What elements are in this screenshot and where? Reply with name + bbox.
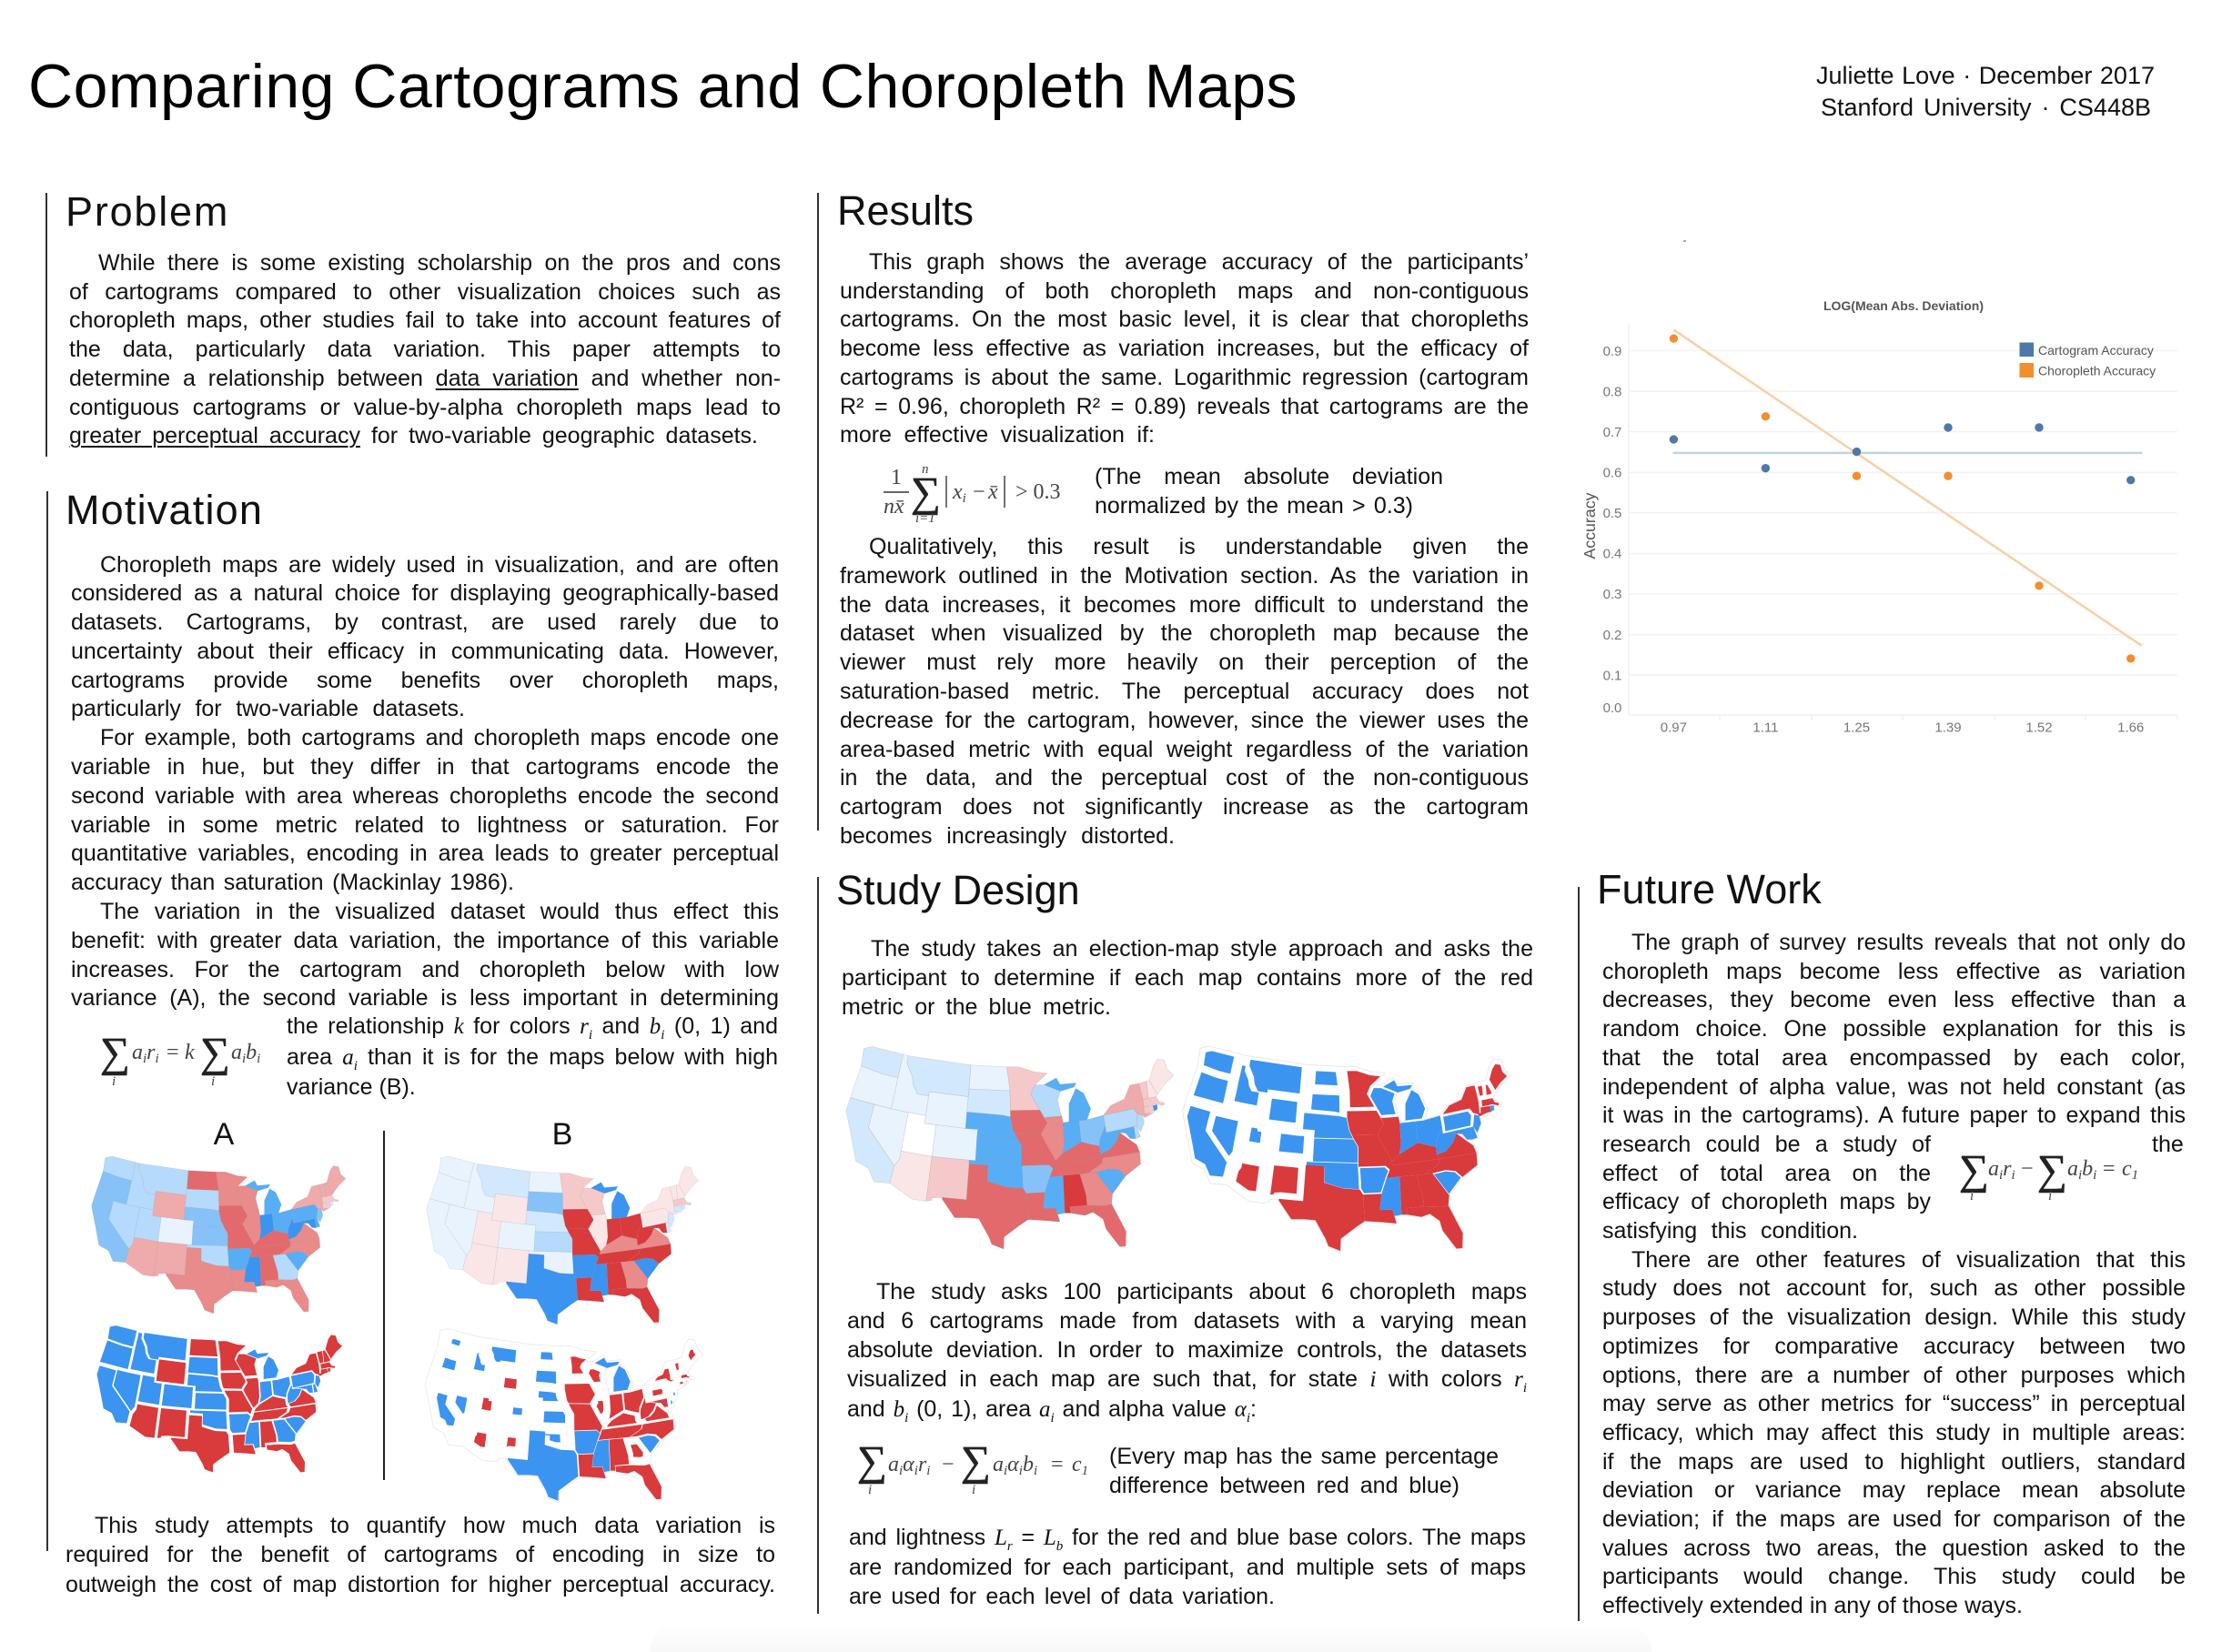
- plot area: [1581, 323, 2177, 736]
- map: non-contiguous cartogram, high variance: [425, 1328, 703, 1503]
- text: future work paragraphs: The graph of survey results reveals that not only do: [1631, 930, 2186, 955]
- legend: Cartogram Accuracy: [2038, 343, 2154, 358]
- text: beside formula: [287, 1013, 778, 1100]
- text: future work paragraphs: options, there are a number of other purposes which: [1602, 1363, 2186, 1388]
- formula: sum a r equals k sum a b: i: [156, 1052, 159, 1066]
- y axis labels: 0.8: [1603, 385, 1621, 399]
- formula: alpha weighted sums constant: 1: [1082, 1464, 1088, 1478]
- formula: sum a r equals k sum a b: ∑: [200, 1029, 230, 1075]
- title: Comparing Cartograms and Choropleth Maps: [28, 52, 1298, 121]
- x axis labels: 1.66: [2117, 720, 2144, 736]
- formula: constant total area difference: i: [1970, 1189, 1974, 1204]
- text: motivation paragraphs: cartograms provide some benefits over choropleth maps,: [71, 668, 779, 693]
- text: participants and controls: The study asks 100 participants about 6 choropleth maps: [876, 1279, 1527, 1304]
- formula: mean absolute deviation condition: [884, 462, 1061, 526]
- text: motivation paragraphs: considered as a natural choice for displaying geographically-based: [71, 580, 779, 606]
- y axis labels: 0.7: [1603, 425, 1621, 440]
- panel: problem: [45, 188, 781, 457]
- formula: alpha weighted sums constant: a: [888, 1453, 899, 1476]
- text: motivation paragraphs: particularly for two-variable datasets.: [71, 696, 465, 721]
- formula: mean absolute deviation condition: x̄: [987, 480, 998, 504]
- text: results intro: This graph shows the average accuracy of the participants’: [869, 249, 1529, 275]
- author and course byline: [1816, 62, 2155, 121]
- formula: sum a r equals k sum a b: a: [132, 1041, 143, 1064]
- text: study approach: [842, 936, 1533, 1020]
- formula: constant total area difference: i: [2093, 1168, 2096, 1183]
- text: participants and controls: and bi (0, 1), area ai and alpha value αi:: [847, 1396, 1257, 1425]
- text: motivation paragraphs: Choropleth maps are widely used in visualization, and are often: [100, 551, 779, 577]
- text: lightness and randomization: are randomized for each participant, and multiple sets of maps: [849, 1555, 1526, 1580]
- label: map group A: A: [214, 1117, 234, 1152]
- map: example non-contiguous cartogram: [1182, 1046, 1512, 1252]
- text: qualitative discussion: dataset when visualized by the choropleth map because the: [840, 620, 1529, 646]
- text: study aim: outweigh the cost of map distortion for higher perceptual accuracy.: [66, 1572, 775, 1597]
- map: choropleth, high variance: [426, 1155, 699, 1325]
- text: future work paragraphs: effect of total area on the: [1602, 1161, 1931, 1186]
- formula: constant total area difference: b: [2082, 1157, 2093, 1181]
- text: formula explanation: [1095, 464, 1443, 519]
- formula: alpha weighted sums constant: i: [926, 1464, 930, 1478]
- text: problem statement: contiguous cartograms or value-by-alpha choropleth maps lead to: [69, 395, 781, 420]
- text: qualitative discussion: viewer must rely more heavily on their perception of the: [840, 650, 1529, 675]
- formula: constant total area difference: 1: [2132, 1168, 2138, 1183]
- formula: alpha weighted sums constant: r: [918, 1453, 927, 1476]
- legend: Choropleth Accuracy: [2038, 364, 2156, 378]
- y axis labels: 0.4: [1603, 547, 1621, 562]
- formula: sum a r equals k sum a b: =: [167, 1041, 179, 1064]
- text: future work paragraphs: the: [2152, 1132, 2184, 1157]
- text: formula explanation: (Every map has the same percentage: [1109, 1444, 1499, 1469]
- formula: alpha weighted sums constant: i: [899, 1464, 903, 1478]
- text: future work paragraphs: deviation or variance may replace mean absolute: [1602, 1477, 2186, 1503]
- text: formula explanation: difference between red and blue): [1109, 1473, 1459, 1498]
- text: study aim: [66, 1513, 775, 1597]
- formula: mean absolute deviation condition: n: [922, 462, 928, 477]
- text: motivation paragraphs: variable in hue, but they differ in that cartograms encode the: [71, 754, 779, 780]
- text: qualitative discussion: decrease for the cartogram, however, since the viewer uses the: [840, 708, 1529, 733]
- formula: constant total area difference: =: [2103, 1157, 2116, 1181]
- text: motivation paragraphs: The variation in the visualized dataset would thus effect this: [100, 899, 779, 924]
- text: motivation paragraphs: datasets. Cartograms, by contrast, are used rarely due to: [71, 609, 779, 635]
- x axis labels: [1661, 720, 2144, 736]
- formula: sum a r equals k sum a b: k: [185, 1041, 195, 1064]
- text: study approach: The study takes an election-map style approach and asks the: [871, 936, 1533, 962]
- y axis labels: [1603, 344, 1621, 716]
- formula: constant total area difference: a: [2067, 1157, 2078, 1181]
- text: motivation paragraphs: variable in some metric related to lightness or saturation. For: [71, 812, 779, 838]
- y axis title: Accuracy: [1581, 492, 1599, 559]
- formula: constant total area difference: i: [2078, 1168, 2082, 1183]
- formula: constant total area difference: c: [2122, 1157, 2132, 1181]
- formula: alpha weighted sums constant: i: [868, 1483, 872, 1497]
- chart: accuracy vs log mean absolute deviation: [1581, 240, 2178, 736]
- formula: alpha weighted sums constant: a: [993, 1453, 1004, 1476]
- formula: sum a r equals k sum a b: i: [242, 1052, 246, 1066]
- text: results intro: become less effective as variation increases, but the efficacy of: [840, 336, 1529, 361]
- y axis labels: 0.3: [1603, 587, 1621, 602]
- text: motivation paragraphs: [71, 551, 779, 1011]
- text: future work paragraphs: deviation; if the maps are used for comparison of the: [1602, 1506, 2186, 1532]
- chart title: LOG(Mean Abs. Deviation): [1823, 298, 1984, 313]
- text: future work paragraphs: optimizes for comparative accuracy between two: [1602, 1334, 2186, 1359]
- text: future work paragraphs: [1602, 930, 2186, 1618]
- trend lines: [1672, 330, 2142, 646]
- formula: constant total area difference: ∑: [1959, 1146, 1989, 1193]
- text: study approach: metric or the blue metric.: [842, 994, 1111, 1020]
- text: future work paragraphs: if the maps are used to highlight outliers, standard: [1602, 1449, 2186, 1475]
- y axis labels: 0.2: [1603, 628, 1621, 643]
- formula: sum a r equals k sum a b: r: [146, 1041, 156, 1064]
- text: motivation paragraphs: benefit: with greater data variation, the importance of this variable: [71, 928, 779, 953]
- text: future work paragraphs: satisfying this condition.: [1602, 1218, 1858, 1244]
- formula: constant total area difference: i: [2048, 1189, 2052, 1204]
- heading: problem: Problem: [66, 188, 229, 235]
- text: future work paragraphs: values across two areas, the question asked to the: [1602, 1536, 2186, 1561]
- label: map group B: B: [552, 1117, 572, 1152]
- text: problem statement: [69, 250, 781, 448]
- formula: sum a r equals k sum a b: ∑: [100, 1029, 130, 1075]
- panel: results: [817, 187, 1529, 849]
- formula: alpha weighted sums constant: i: [1019, 1464, 1023, 1478]
- formula: alpha weighted sums constant: i: [1034, 1464, 1037, 1478]
- formula: sum a r equals k sum a b: i: [257, 1052, 260, 1066]
- panel: study design: [817, 867, 1533, 1614]
- text: results intro: [840, 249, 1529, 448]
- text: future work paragraphs: efficacy of choropleth maps by: [1602, 1189, 1931, 1214]
- formula: sum a r equals k sum a b: i: [211, 1074, 215, 1089]
- y axis labels: 0.5: [1603, 506, 1621, 521]
- panel: future work: [1578, 866, 2186, 1621]
- text: lightness and randomization: are used for each level of data variation.: [849, 1584, 1275, 1609]
- author and course byline: Juliette Love · December 2017: [1816, 62, 2155, 89]
- formula: alpha weighted sums constant: −: [942, 1453, 954, 1476]
- text: qualitative discussion: Qualitatively, this result is understandable given the: [869, 534, 1529, 559]
- text: formula explanation: [1109, 1444, 1499, 1498]
- text: future work paragraphs: independent of alpha value, was not held constant (as: [1602, 1074, 2186, 1100]
- cartogram accuracy points: [1670, 423, 2135, 484]
- heading: future work: Future Work: [1597, 866, 1822, 912]
- text: participants and controls: and 6 cartograms made from datasets with a varying mean: [847, 1308, 1527, 1334]
- text: qualitative discussion: the data increases, it becomes more difficult to understand the: [840, 592, 1529, 618]
- text: future work paragraphs: that the total area encompassed by each color,: [1602, 1045, 2186, 1071]
- legend: [2020, 342, 2156, 378]
- text: problem statement: greater perceptual accuracy for two-variable geographic datasets.: [69, 423, 758, 448]
- formula: constant total area difference: −: [2021, 1157, 2034, 1181]
- formula: sum a r equals k sum a b: a: [231, 1041, 242, 1064]
- formula: mean absolute deviation condition: −: [973, 480, 985, 504]
- text: qualitative discussion: [840, 534, 1529, 849]
- text: qualitative discussion: saturation-based metric. The perceptual accuracy does not: [840, 679, 1529, 704]
- formula: alpha weighted sums constant: i: [972, 1483, 975, 1497]
- x axis labels: 1.25: [1843, 720, 1870, 736]
- text: lightness and randomization: and lightness Lr = Lb for the red and blue base colors. The maps: [849, 1525, 1526, 1554]
- panel: motivation: [46, 487, 779, 1597]
- text: study aim: This study attempts to quantify how much data variation is: [95, 1513, 775, 1538]
- text: future work paragraphs: it was in the cartograms). A future paper to expand this: [1602, 1103, 2186, 1128]
- heading: results: Results: [837, 187, 974, 234]
- text: future work paragraphs: effectively extended in any of those ways.: [1602, 1593, 2023, 1618]
- text: future work paragraphs: research could be a study of: [1602, 1132, 1931, 1157]
- formula: constant total area difference: i: [1999, 1168, 2003, 1183]
- text: results intro: cartograms. On the most basic level, it is clear that choropleths: [840, 307, 1529, 332]
- y axis labels: 0.0: [1603, 700, 1621, 716]
- text: future work paragraphs: purposes of the visualization design. While this study: [1602, 1304, 2186, 1330]
- text: motivation paragraphs: uncertainty about their efficacy in communicating data. However,: [71, 639, 779, 664]
- text: problem statement: determine a relationship between data variation and whether non-: [69, 366, 781, 391]
- formula: alpha weighted sums constant: i: [1004, 1464, 1007, 1478]
- text: motivation paragraphs: For example, both cartograms and choropleth maps encode one: [100, 725, 779, 750]
- text: results intro: R² = 0.96, choropleth R² = 0.89) reveals that cartograms are the: [840, 394, 1529, 419]
- formula: mean absolute deviation condition: x: [953, 480, 963, 504]
- text: problem statement: choropleth maps, other studies fail to take into account features of: [69, 307, 781, 333]
- map: example choropleth: [846, 1046, 1174, 1250]
- formula: constant total area difference: i: [2012, 1168, 2015, 1183]
- heading: motivation: Motivation: [66, 487, 263, 533]
- formula: sum a r equals k sum a b: i: [143, 1052, 146, 1066]
- y axis labels: 0.9: [1603, 344, 1621, 359]
- text: participants and controls: visualized in each map are such that, for state i with colors ri: [847, 1366, 1527, 1395]
- text: participants and controls: [847, 1279, 1527, 1425]
- choropleth accuracy points: [1670, 334, 2135, 663]
- text: problem statement: of cartograms compared to other visualization choices such as: [69, 279, 781, 305]
- text: future work paragraphs: may serve as other metrics for “success” in perceptual: [1602, 1391, 2186, 1416]
- text: motivation paragraphs: accuracy than saturation (Mackinlay 1986).: [71, 870, 514, 895]
- text: qualitative discussion: framework outlined in the Motivation section. As the variation in: [840, 563, 1529, 589]
- formula: constant total area difference: r: [2003, 1157, 2012, 1181]
- formula: mean absolute deviation condition: 1: [891, 466, 902, 489]
- formula: mean absolute deviation condition: ∑: [911, 468, 941, 515]
- x axis labels: 1.11: [1752, 720, 1778, 736]
- formula: alpha weighted sums constant: =: [1051, 1453, 1064, 1476]
- map: cartogram, low variance: [96, 1325, 342, 1472]
- text: qualitative discussion: in the data, and the perceptual cost of the non-contiguous: [840, 765, 1529, 791]
- author and course byline: Stanford University · CS448B: [1821, 94, 2151, 121]
- text: future work paragraphs: choropleth maps become less effective as variation: [1602, 959, 2186, 984]
- formula: sum a r equals k sum a b: i: [112, 1074, 116, 1089]
- text: beside formula: the relationship k for colors ri and bi (0, 1) and: [287, 1013, 778, 1043]
- x axis labels: 1.52: [2025, 720, 2053, 736]
- text: participants and controls: absolute deviation. In order to maximize controls, the datasets: [847, 1337, 1527, 1363]
- text: future work paragraphs: participants would change. This study could be: [1602, 1564, 2186, 1589]
- text: formula explanation: normalized by the mean > 0.3): [1095, 493, 1413, 519]
- formula: alpha weighted sums constant: α: [1007, 1453, 1019, 1476]
- formula: constant total area difference: [1959, 1146, 2138, 1204]
- text: motivation paragraphs: second variable with area whereas choropleths encode the second: [71, 783, 779, 809]
- text: study approach: participant to determine if each map contains more of the red: [842, 965, 1533, 991]
- text: qualitative discussion: cartogram does not significantly increase as the cartogram: [840, 794, 1529, 820]
- formula: constant total area difference: ∑: [2037, 1146, 2067, 1193]
- text: study aim: required for the benefit of cartograms of encoding in size to: [66, 1542, 775, 1567]
- text: motivation paragraphs: variance (A), the second variable is less important in determining: [71, 985, 779, 1011]
- text: results intro: cartograms is about the same. Logarithmic regression (cartogram: [840, 365, 1529, 390]
- formula: alpha weighted sums constant: ∑: [857, 1437, 887, 1484]
- text: motivation paragraphs: quantitative variables, encoding in area leads to greater perceptual: [71, 841, 779, 866]
- formula: alpha weighted sums constant: ∑: [961, 1437, 991, 1484]
- map: choropleth, low variance: [91, 1155, 346, 1314]
- text: future work paragraphs: random choice. One possible explanation for this is: [1602, 1016, 2186, 1042]
- text: beside formula: area ai than it is for the maps below with high: [287, 1044, 778, 1073]
- formula: alpha weighted sums constant: [857, 1437, 1088, 1497]
- formula: alpha weighted sums constant: α: [903, 1453, 914, 1476]
- text: future work paragraphs: There are other features of visualization that this: [1631, 1247, 2186, 1273]
- text: results intro: more effective visualization if:: [840, 422, 1155, 448]
- formula: sum a r equals k sum a b: b: [246, 1041, 257, 1064]
- text: formula explanation: (The mean absolute deviation: [1095, 464, 1443, 489]
- x axis labels: 1.39: [1934, 720, 1962, 736]
- formula: mean absolute deviation condition: i: [963, 491, 966, 506]
- formula: constant total area difference: a: [1988, 1157, 1999, 1181]
- heading: study design: Study Design: [836, 867, 1080, 913]
- y axis labels: 0.6: [1603, 466, 1621, 481]
- formula: alpha weighted sums constant: i: [914, 1464, 918, 1478]
- text: problem statement: the data, particularly data variation. This paper attempts to: [69, 337, 781, 362]
- formula: mean absolute deviation condition: i=1: [915, 511, 935, 526]
- text: qualitative discussion: area-based metric with equal weight regardless of the variation: [840, 737, 1529, 762]
- x axis labels: 0.97: [1661, 720, 1687, 736]
- text: future work paragraphs: study does not account for, such as other possible: [1602, 1275, 2186, 1301]
- formula: alpha weighted sums constant: c: [1072, 1453, 1082, 1476]
- text: qualitative discussion: becomes increasingly distorted.: [840, 823, 1175, 849]
- formula: mean absolute deviation condition: > 0.3: [1015, 480, 1061, 504]
- y axis labels: 0.1: [1603, 668, 1621, 683]
- text: problem statement: While there is some existing scholarship on the pros and cons: [98, 250, 781, 276]
- formula: sum a r equals k sum a b: [100, 1029, 260, 1089]
- text: future work paragraphs: efficacy, which may affect this study in multiple areas:: [1602, 1420, 2186, 1446]
- text: beside formula: variance (B).: [287, 1074, 416, 1100]
- text: lightness and randomization: [849, 1525, 1526, 1609]
- formula: alpha weighted sums constant: b: [1023, 1453, 1034, 1476]
- text: motivation paragraphs: increases. For the cartogram and choropleth below with low: [71, 957, 779, 982]
- text: future work paragraphs: decreases, they become even less effective than a: [1602, 987, 2186, 1012]
- formula: mean absolute deviation condition: nx̄: [884, 495, 904, 519]
- text: results intro: understanding of both choropleth maps and non-contiguous: [840, 278, 1529, 304]
